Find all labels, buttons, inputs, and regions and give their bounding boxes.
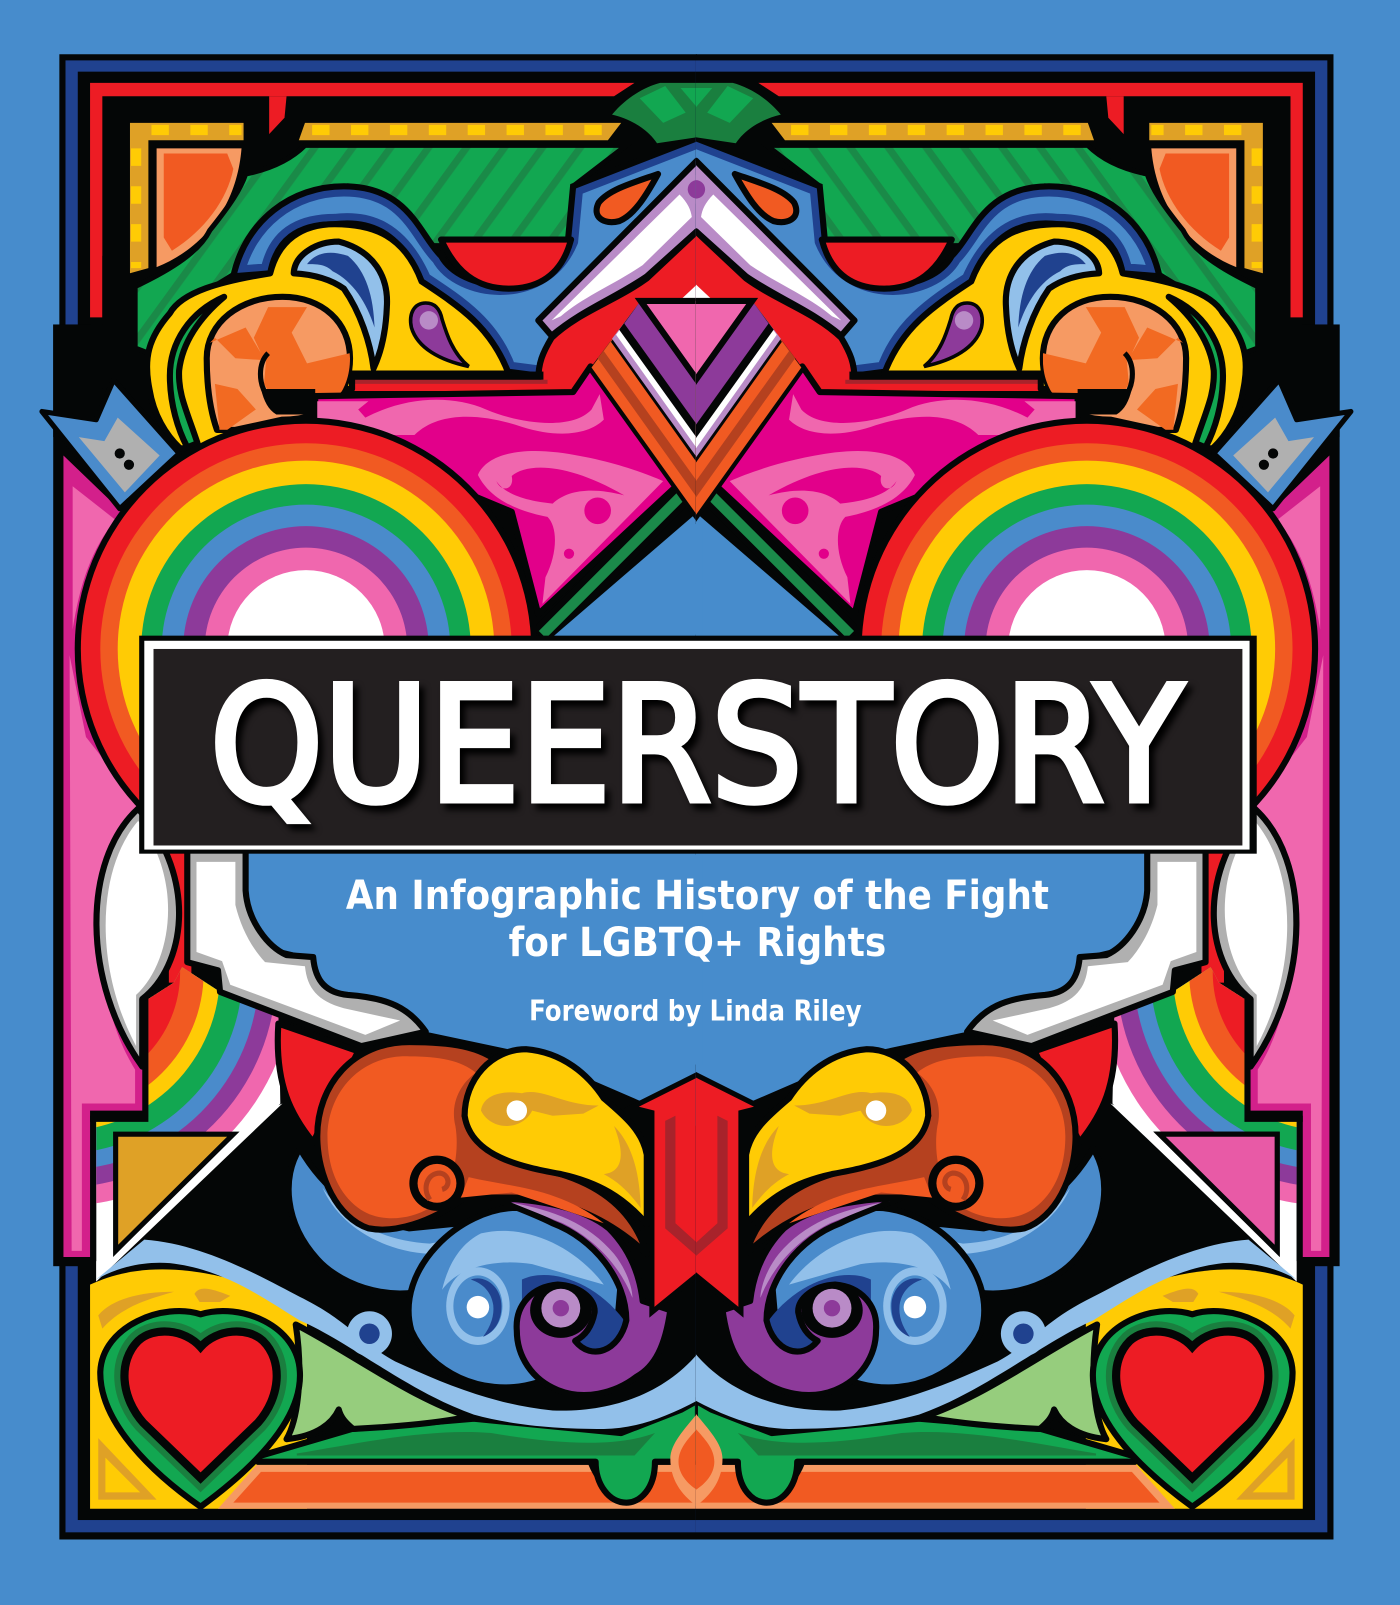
blue cat shape (42, 380, 179, 509)
pink triangle (641, 301, 716, 380)
pink triangle right (1160, 1134, 1277, 1251)
green crown (612, 83, 698, 143)
green diagonal strip (540, 485, 692, 637)
red strip (169, 850, 191, 983)
blue lower field (242, 850, 698, 1126)
orange bottom strip (218, 1461, 698, 1509)
rainbow (75, 418, 537, 880)
bottom yellow panel (90, 1269, 307, 1509)
blue arch (233, 138, 716, 376)
blue cloud (289, 1148, 512, 1294)
green striped panel (135, 145, 626, 353)
light blue wave (96, 1240, 698, 1429)
magenta panel (315, 366, 680, 614)
foreword credit: Foreword by Linda Riley (529, 994, 862, 1028)
title text: QUEERSTORY (210, 652, 1183, 838)
green crescent (170, 297, 224, 447)
blue teardrop (294, 242, 387, 368)
pink side column (63, 456, 143, 1257)
red cup (441, 240, 571, 289)
white oval (96, 809, 179, 1067)
central ribbon (631, 1075, 716, 1312)
light green wedge (287, 1325, 469, 1439)
yellow blob (147, 224, 509, 448)
ornamental right half (676, 54, 1400, 1539)
yellow teardrop (465, 1049, 647, 1224)
ornamental left half (0, 54, 716, 1539)
lower rainbow (0, 739, 297, 1290)
green bottom strip (251, 1400, 698, 1503)
subtitle: for LGBTQ+ Rights (509, 920, 886, 966)
title banner (139, 636, 1257, 854)
subtitle (346, 873, 1049, 966)
peach ball (207, 297, 350, 435)
white diagonal (96, 1103, 282, 1282)
lilac book page (538, 161, 716, 336)
chevron stack (588, 285, 716, 522)
white grey scroll (187, 850, 426, 1046)
orange scroll (317, 1042, 647, 1254)
black curl base (261, 389, 315, 415)
heart surround (100, 1311, 300, 1507)
blue centre triangle (551, 512, 698, 639)
heart (124, 1332, 277, 1478)
purple teardrop (411, 303, 469, 366)
orange drop (597, 174, 658, 222)
gold dashed border (130, 123, 621, 273)
orange curl (409, 1156, 465, 1211)
flame ornament (670, 1413, 698, 1507)
red wedge (278, 1024, 358, 1142)
frame (53, 54, 698, 1539)
purple swirl (491, 1198, 670, 1395)
red centre (344, 231, 716, 394)
orange corner shield (157, 148, 242, 267)
blue swirl (409, 1208, 624, 1387)
black divider (90, 998, 148, 1122)
subtitle: An Infographic History of the Fight (346, 873, 1049, 919)
gold triangle (116, 1134, 233, 1251)
